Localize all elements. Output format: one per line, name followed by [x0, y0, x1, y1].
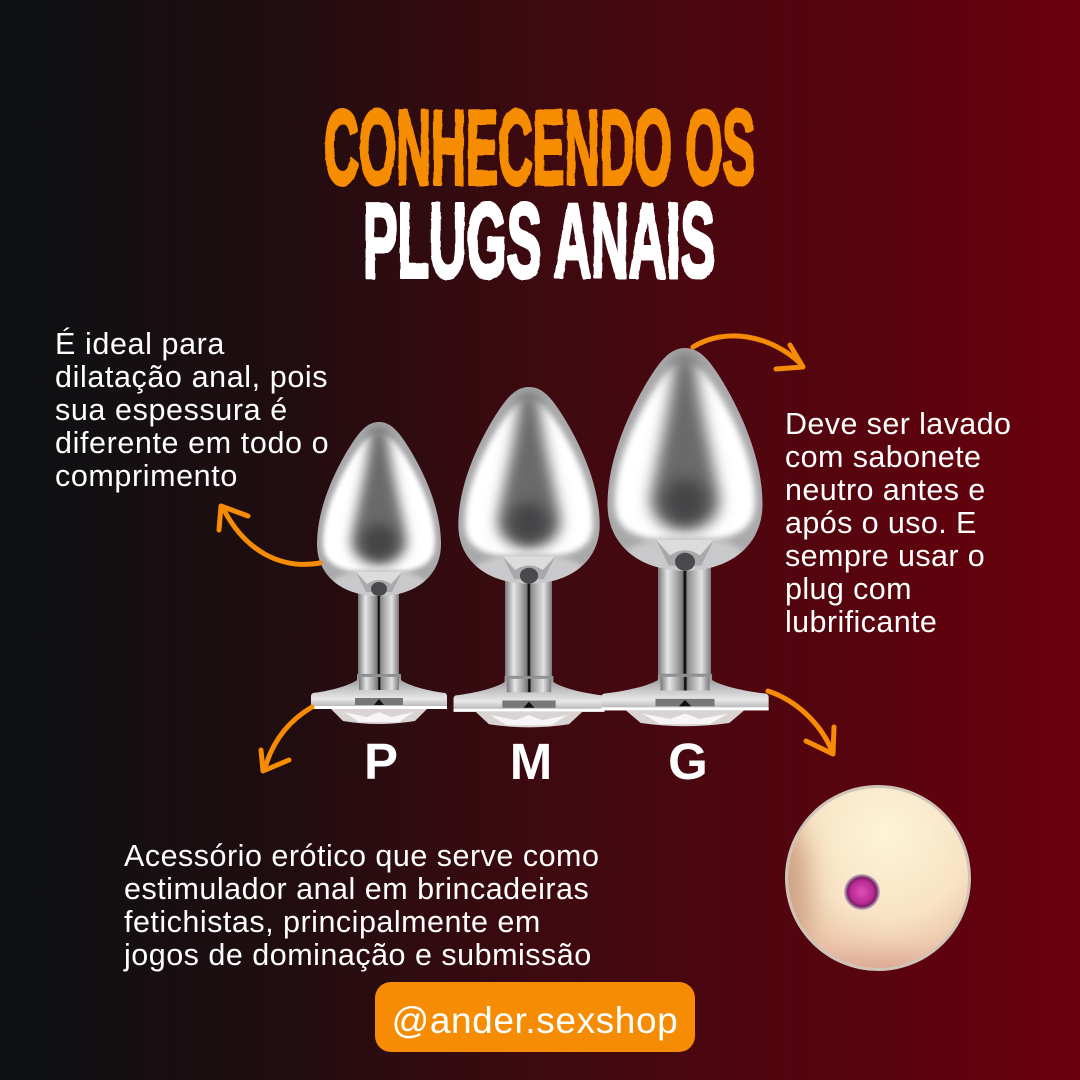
- text: description: Acessório erótico que serve como: [124, 839, 599, 873]
- title: PLUGS ANAIS: [363, 182, 715, 300]
- text: dilatation note: comprimento: [55, 459, 238, 493]
- plug P: [311, 422, 447, 724]
- text: description: jogos de dominação e submissão: [124, 938, 592, 972]
- handle badge: @ander.sexshop: [392, 1000, 678, 1041]
- arrow: to washing note: [693, 336, 803, 369]
- size labels: [364, 733, 708, 790]
- text: washing note: plug com: [785, 572, 912, 606]
- plug M: [454, 387, 604, 727]
- arrow: to description: [261, 707, 312, 771]
- gem: [844, 874, 880, 910]
- text: washing note: Deve ser lavado: [785, 407, 1011, 441]
- text: washing note: após o uso. E: [785, 506, 977, 540]
- handle badge: [375, 982, 695, 1052]
- text: description: fetichistas, principalmente em: [124, 905, 541, 939]
- text: description: [123, 839, 599, 972]
- text: washing note: neutro antes e: [785, 473, 986, 507]
- text: dilatation note: [55, 327, 329, 493]
- size labels: P: [364, 733, 398, 790]
- text: washing note: sempre usar o: [785, 539, 985, 573]
- text: washing note: lubrificante: [785, 605, 937, 639]
- size labels: G: [668, 733, 708, 790]
- text: dilatation note: dilatação anal, pois: [55, 360, 328, 394]
- title: [324, 89, 755, 300]
- text: description: estimulador anal em brincadeiras: [124, 872, 589, 906]
- size labels: M: [510, 733, 552, 790]
- text: dilatation note: sua espessura é: [55, 393, 288, 427]
- product illustration: [216, 333, 971, 971]
- text: washing note: com sabonete: [785, 440, 981, 474]
- text: washing note: [785, 407, 1011, 639]
- text: dilatation note: diferente em todo o: [55, 426, 329, 460]
- text: dilatation note: É ideal para: [55, 327, 225, 361]
- arrow: to usage photo: [768, 691, 834, 754]
- usage photo circle: [785, 785, 971, 971]
- plug G: [601, 348, 769, 726]
- arrow: to dilatation note: [219, 506, 320, 564]
